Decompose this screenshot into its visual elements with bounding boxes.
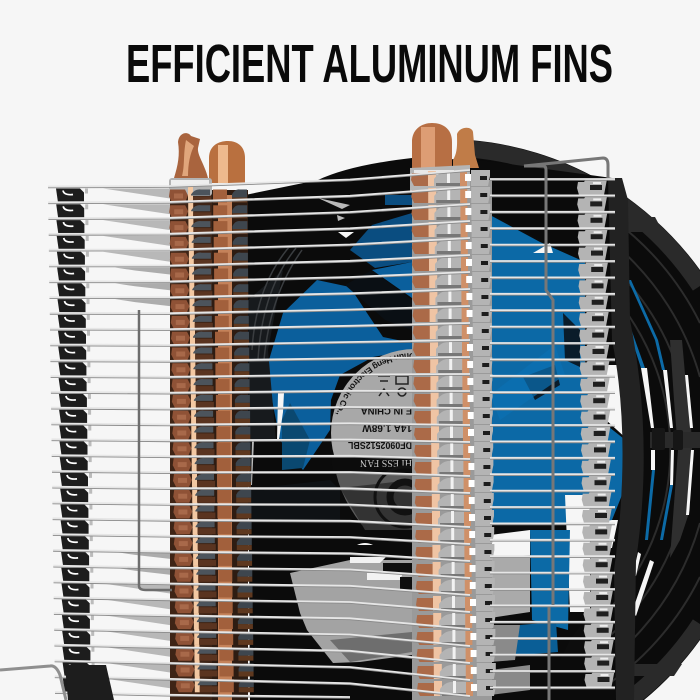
fan outer shroud [470, 140, 700, 700]
wire clip: right [524, 158, 608, 700]
blue left blade [266, 280, 412, 470]
gray ring band [670, 340, 690, 558]
hub label: 14A 1.68W [362, 422, 412, 433]
blue right blade [490, 215, 628, 525]
right pipe band [412, 180, 492, 700]
hub label: DF0902512SBL [348, 439, 412, 451]
wire clip: bottom left [0, 666, 66, 700]
left clips and pipe rows [56, 186, 254, 692]
label glyphs [378, 376, 408, 396]
wire clip: left [139, 310, 172, 590]
cap: twisted right [453, 128, 479, 168]
right pipe rows [411, 170, 496, 696]
aluminum fins [48, 170, 615, 698]
frame curved lines [252, 246, 302, 360]
fan blades [240, 190, 628, 695]
cap: bullet left [209, 141, 245, 183]
shroud spokes [625, 217, 700, 676]
collars [169, 178, 212, 196]
shroud gaps and blue arcs [628, 280, 694, 616]
hub label: E IN CHINA [361, 405, 412, 416]
white glints [277, 232, 553, 545]
cap: bullet right [412, 123, 452, 168]
cap: twisted left [174, 133, 208, 178]
hub label [331, 349, 412, 530]
left pipe pair [170, 190, 214, 700]
hub label: HI ESS FAN [360, 457, 412, 468]
chrome reflection [290, 557, 412, 663]
hub label: Dhun Heng Electronic Co.,Ltd [336, 353, 412, 414]
fan front frame [245, 158, 612, 700]
left fin reflections [103, 188, 170, 688]
frame vertical bar [608, 178, 644, 700]
right clip strip [577, 179, 614, 687]
logo [375, 467, 435, 527]
white opening behind strip [600, 365, 628, 548]
bottom clip block [65, 665, 114, 700]
copper pipes [169, 123, 492, 700]
